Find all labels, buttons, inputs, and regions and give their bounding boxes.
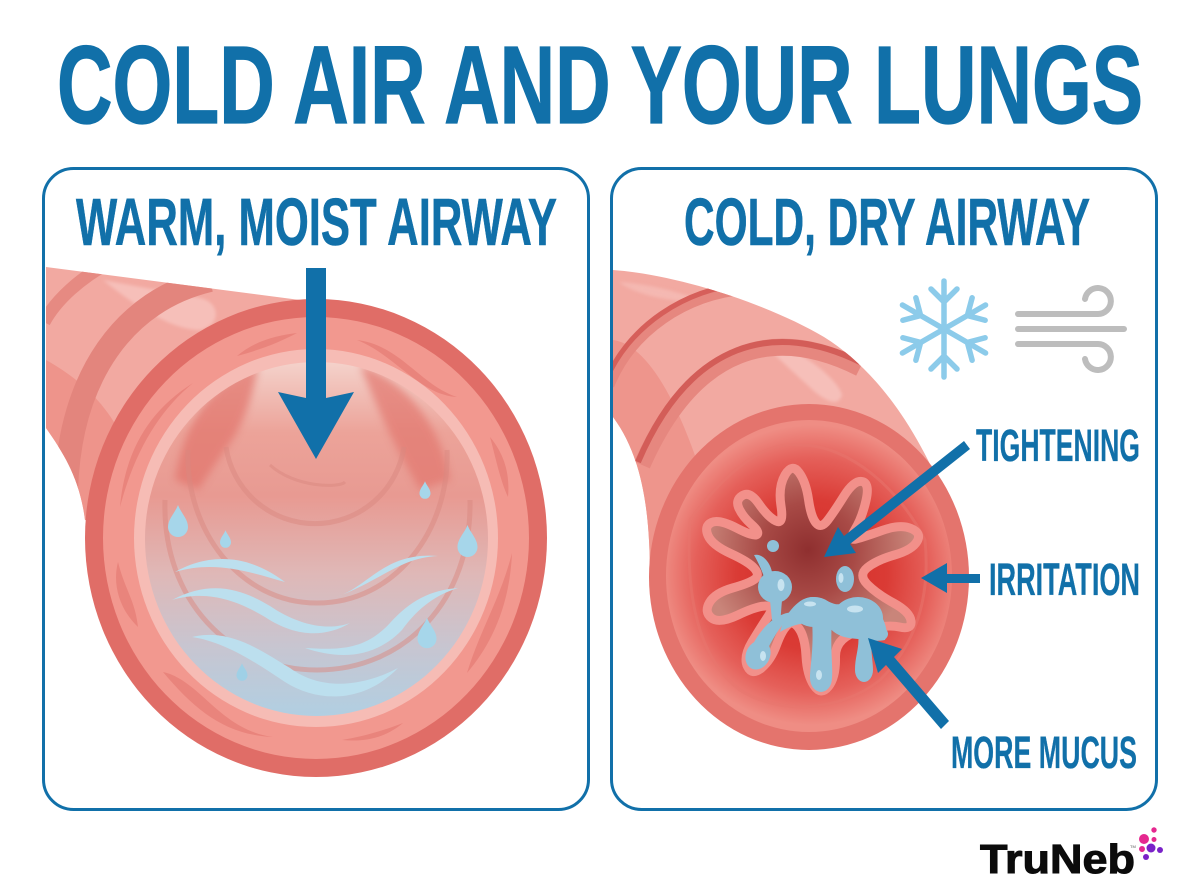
water droplets xyxy=(168,481,478,681)
airway lumen xyxy=(145,362,488,716)
airway end wall xyxy=(649,404,969,750)
logo: TruNeb xyxy=(980,827,1163,882)
arrow: air flowing in xyxy=(278,268,354,459)
panel: warm moist airway xyxy=(44,168,588,810)
icon: snowflake xyxy=(896,281,992,377)
illustration: narrowed airway tube xyxy=(606,270,969,750)
folded narrowed lumen xyxy=(707,468,919,691)
logo: TruNeb: TruNeb xyxy=(980,836,1135,882)
illustration: open airway tube xyxy=(44,262,547,777)
arrow: irritation xyxy=(921,563,980,593)
heading: warm moist airway: WARM, MOIST AIRWAY xyxy=(76,185,557,260)
panel: cold dry airway xyxy=(606,168,1156,810)
mucus blobs xyxy=(741,540,888,692)
icon: wind xyxy=(1018,288,1124,370)
inflamed inner wall xyxy=(666,420,952,732)
logo: TruNeb: TM xyxy=(1130,844,1136,849)
arrow: tightening xyxy=(824,441,970,557)
moisture waves xyxy=(172,556,458,696)
outer ring xyxy=(85,299,547,777)
arrow: more mucus xyxy=(868,638,949,729)
